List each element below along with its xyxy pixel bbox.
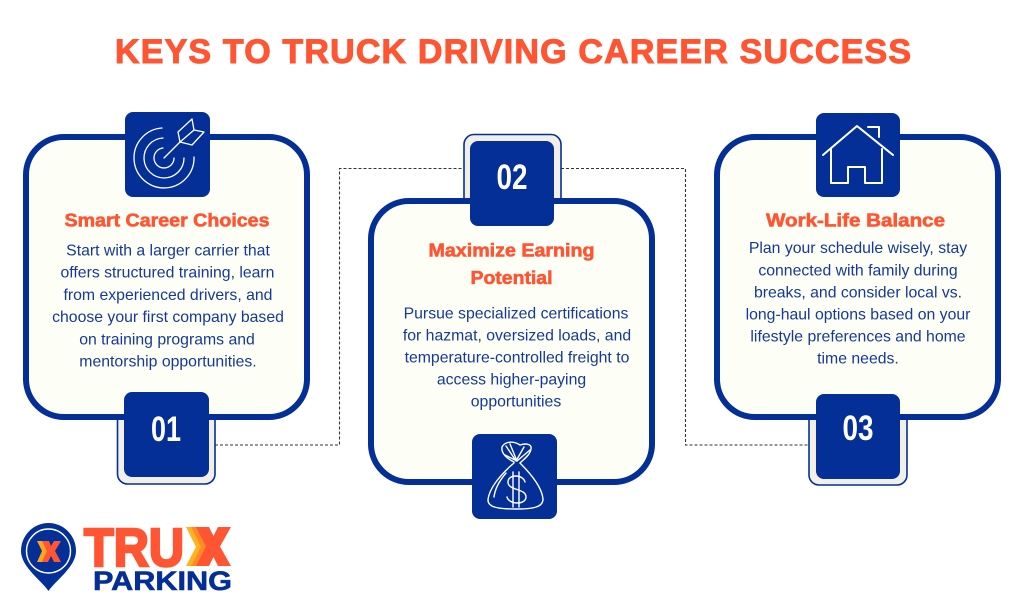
number 01: 01	[151, 410, 181, 449]
card body 3	[717, 137, 998, 417]
body text 1: offers structured training, learn	[61, 264, 274, 282]
number tab backing 01	[118, 400, 215, 484]
body text 3	[746, 240, 970, 368]
icon: map pin	[21, 523, 76, 591]
logo: trux parking	[21, 518, 232, 596]
icon: money bag	[472, 434, 557, 519]
number tab backing 02	[464, 134, 561, 214]
body text 2: temperature-controlled freight to	[405, 350, 630, 366]
heading: maximize earning potential	[428, 240, 594, 288]
number 03: 03	[842, 409, 874, 448]
body text 1: choose your first company based	[52, 309, 284, 326]
heading: maximize earning potential: Potential	[470, 267, 552, 288]
wordmark: X with chevrons	[186, 527, 231, 566]
number 02: 02	[496, 158, 528, 197]
body text 1	[52, 242, 284, 370]
wordmark: PARKING: PARKING	[93, 566, 232, 596]
card body 1	[26, 137, 307, 417]
number 03	[816, 394, 900, 479]
panel: maximize earning potential	[371, 134, 652, 519]
dashed connector: step 1 to step 2	[215, 168, 464, 445]
body text 3: lifestyle preferences and home	[750, 328, 966, 346]
wordmark: TRU: TRU	[84, 518, 184, 578]
heading: smart career choices: Smart Career Choices	[64, 210, 270, 230]
body text 2: for hazmat, oversized loads, and	[403, 328, 631, 344]
body text 2	[403, 306, 631, 410]
heading: work-life balance: Work-Life Balance	[766, 210, 945, 230]
body text 3: Plan your schedule wisely, stay	[749, 240, 967, 257]
card body 2	[371, 201, 652, 482]
body text 2: Pursue specialized certifications	[404, 306, 628, 322]
dashed connector: step 2 to step 3	[561, 168, 809, 445]
icon: house	[816, 113, 900, 197]
body text 2: opportunities	[471, 394, 561, 410]
panel: smart career choices	[26, 112, 307, 484]
panel: work-life balance	[717, 113, 998, 485]
body text 2: access higher-paying	[437, 372, 586, 388]
title: KEYS TO TRUCK DRIVING CAREER SUCCESS	[115, 33, 911, 71]
heading: maximize earning potential: Maximize Earning	[428, 240, 594, 260]
body text 3: long-haul options based on your	[746, 306, 970, 324]
body text 3: breaks, and consider local vs.	[754, 284, 962, 302]
body text 1: on training programs and	[79, 332, 255, 348]
body text 1: from experienced drivers, and	[64, 287, 272, 304]
body text 1: Start with a larger carrier that	[66, 242, 270, 260]
number tab backing 03	[809, 400, 907, 485]
icon: target	[125, 112, 210, 197]
body text 1: mentorship opportunities.	[79, 354, 257, 370]
body text 3: connected with family during	[758, 262, 958, 280]
body text 3: time needs.	[817, 350, 899, 368]
number 02	[470, 141, 554, 226]
number 01	[124, 392, 209, 477]
